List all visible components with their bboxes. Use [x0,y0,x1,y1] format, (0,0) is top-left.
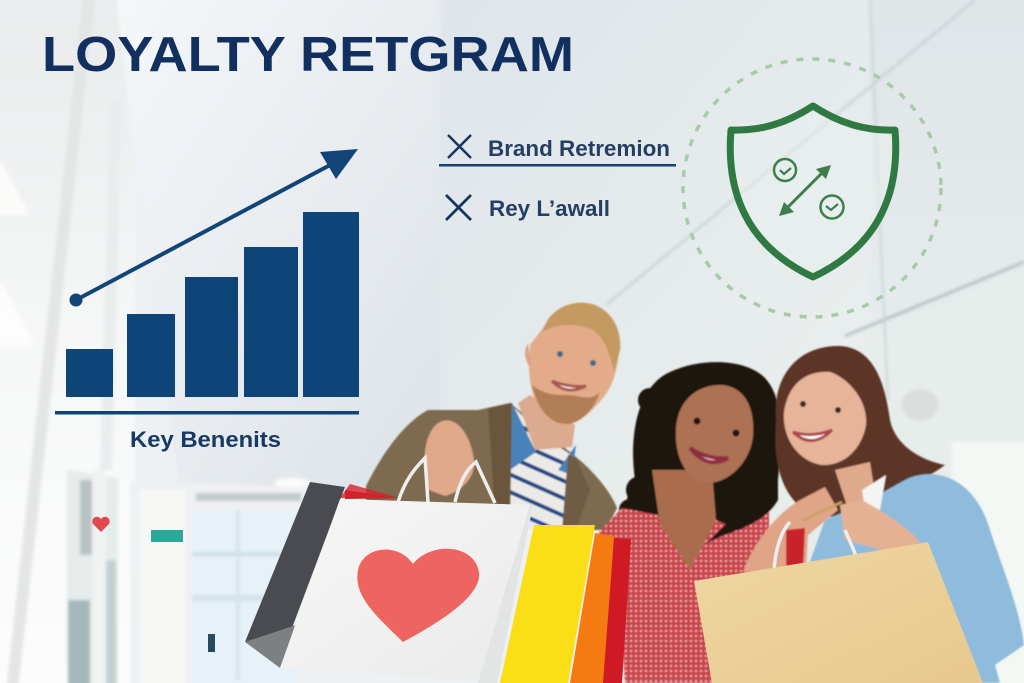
growth arrow [70,149,358,306]
yellow and orange shopping bags [500,525,631,683]
icon: green shield in dashed circle [683,59,941,317]
far corridor [130,480,365,683]
white shopping bag with heart [245,458,533,683]
woman with long hair [743,346,1024,683]
man with shopping bag [366,303,620,530]
bar chart: key benefits [55,149,359,452]
icon: red heart [357,549,479,642]
kraft shopping bag [694,522,983,683]
list item: rey lawall: Rey L’awall [489,196,610,221]
list item: rey lawall [446,195,610,221]
woman with curly hair [599,362,781,683]
list item: brand retention [439,135,676,166]
title: LOYALTY RETGRAM [42,28,574,82]
list item: brand retention: Brand Retremion [488,136,670,161]
chart caption: Key Benenits [130,427,281,452]
